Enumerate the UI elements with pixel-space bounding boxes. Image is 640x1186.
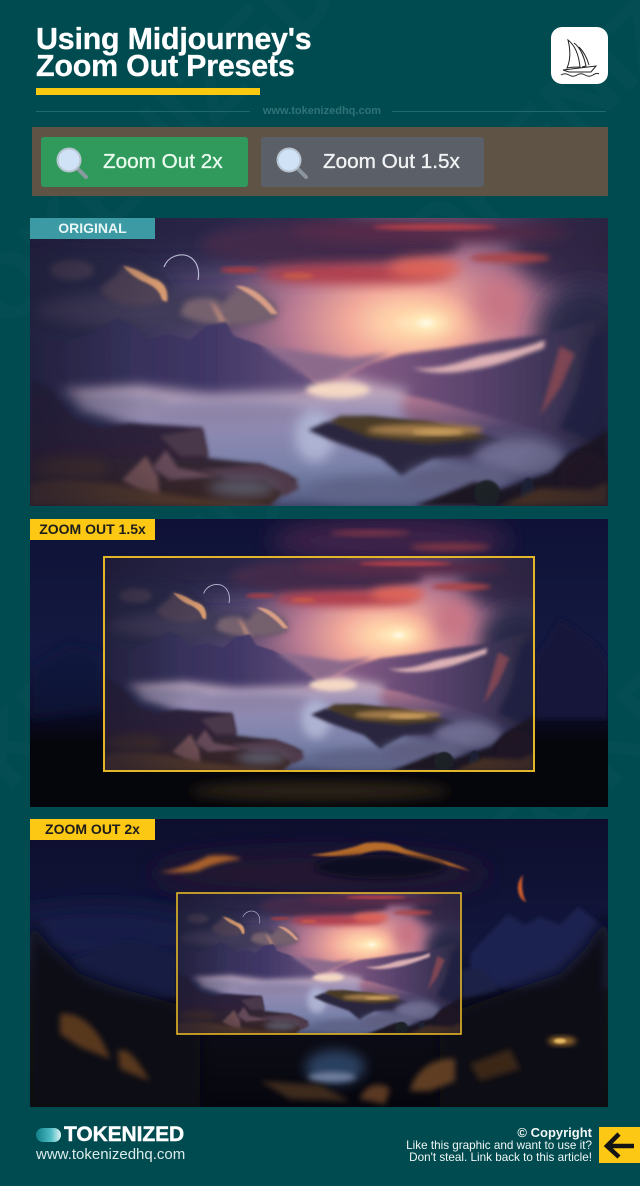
title: Zoom Out Presets [36, 49, 295, 83]
title: Using Midjourney's [36, 22, 311, 56]
brand name: TOKENIZED [64, 1123, 184, 1146]
icon: Tokenized mark [36, 1128, 61, 1142]
distant mountains [470, 907, 608, 989]
button: Zoom Out 2x: Zoom Out 2x [103, 150, 223, 173]
title [36, 22, 311, 83]
label: zoom out 1.5x [30, 519, 155, 540]
icon: Midjourney logo [551, 27, 608, 84]
illustration: zoomed out 2x landscape [30, 819, 608, 1107]
title underline [36, 88, 260, 95]
button: Zoom Out 1.5x: Zoom Out 1.5x [323, 150, 460, 173]
dark hills [30, 919, 200, 1107]
panel: zoom buttons bar [32, 127, 608, 196]
icon: yellow back arrow [599, 1127, 640, 1163]
label: zoom out 1.5x: ZOOM OUT 1.5x [39, 521, 146, 537]
panel: zoom out 1.5x image [30, 519, 608, 807]
label: original [30, 218, 155, 239]
lake [305, 1050, 365, 1084]
illustration: zoomed out 1.5x landscape [30, 519, 608, 807]
copyright note line 1: Like this graphic and want to use it? [406, 1139, 592, 1152]
label: zoom out 2x [30, 819, 155, 840]
copyright note line 2: Don't steal. Link back to this article! [409, 1151, 592, 1164]
panel: zoom out 2x image [30, 819, 608, 1107]
panel: original image [30, 218, 608, 506]
golden foreground [60, 1014, 110, 1059]
button: Zoom Out 1.5x [261, 137, 484, 187]
illustration: original landscape [30, 218, 608, 506]
label: original: ORIGINAL [58, 220, 127, 236]
website divider: www.tokenizedhq.com [263, 105, 381, 117]
button: Zoom Out 2x [41, 137, 248, 187]
copyright text [406, 1125, 592, 1164]
copyright heading: © Copyright [517, 1125, 592, 1140]
footer website: www.tokenizedhq.com [36, 1146, 185, 1163]
footer logo: Tokenized [36, 1123, 184, 1146]
orange cloud rims [160, 855, 242, 873]
label: zoom out 2x: ZOOM OUT 2x [45, 821, 140, 837]
